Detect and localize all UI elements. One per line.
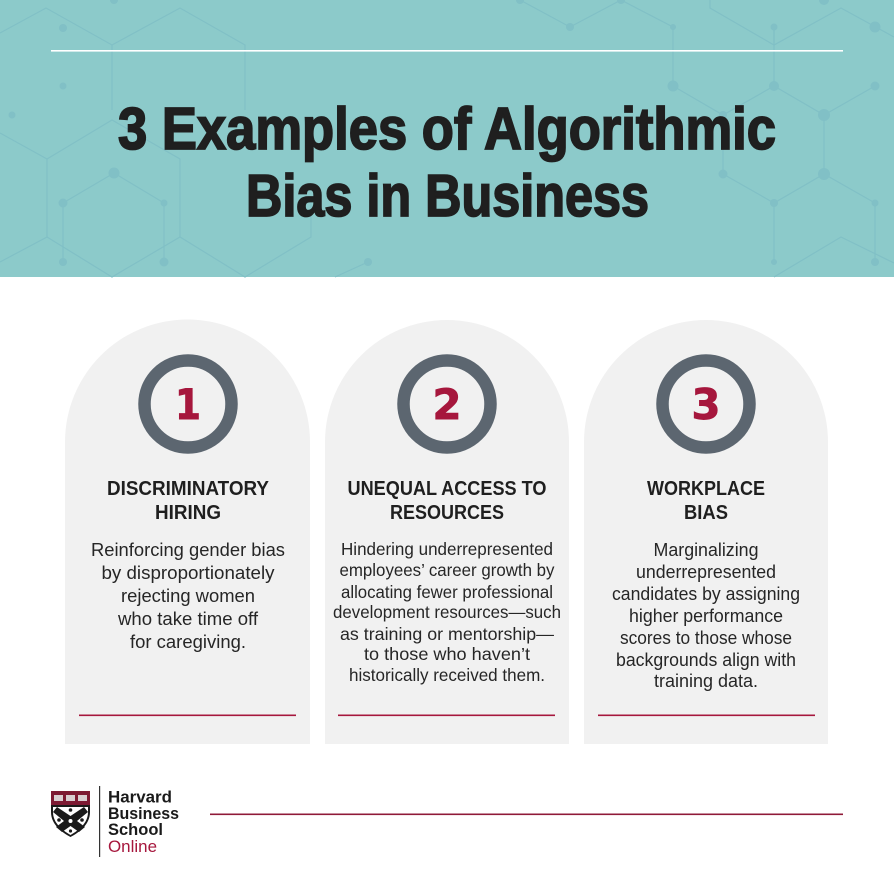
body text: card 2: employees’ career growth by	[340, 560, 555, 580]
body text: card 3: training data.	[654, 671, 758, 691]
heading: discriminatory hiring	[107, 478, 270, 524]
heading: workplace bias	[647, 478, 765, 524]
header banner	[0, 0, 894, 277]
heading: discriminatory hiring: DISCRIMINATORY	[107, 478, 270, 500]
body text: card 2: allocating fewer professional	[341, 582, 553, 602]
title	[118, 96, 776, 229]
body text: card 1: Reinforcing gender bias	[91, 539, 285, 560]
body text: card 2: as training or mentorship—	[340, 624, 554, 644]
panel: discriminatory hiring	[65, 319, 310, 744]
body text: card 2: to those who haven’t	[364, 644, 530, 664]
body text: card 1: for caregiving.	[130, 631, 246, 652]
icon: number 1 badge	[144, 360, 232, 448]
heading: unequal access to resources: RESOURCES	[390, 502, 504, 524]
body text: card 1: who take time off	[117, 608, 259, 629]
panel: unequal access to resources	[325, 320, 569, 744]
heading: workplace bias: BIAS	[684, 502, 728, 524]
heading: unequal access to resources: UNEQUAL ACCESS TO	[348, 478, 546, 500]
body text: card 3: Marginalizing	[654, 540, 758, 560]
body text: card 3: backgrounds align with	[616, 650, 796, 670]
body text: card 2: Hindering underrepresented	[341, 539, 553, 559]
body text: card 3: higher performance	[629, 606, 783, 626]
body text: card 3: underrepresented	[636, 562, 776, 582]
wordmark	[108, 788, 179, 856]
body text: card 2: development resources—such	[333, 602, 561, 622]
icon: number 2 badge: 2	[432, 380, 462, 429]
icon: number 1 badge: 1	[175, 380, 201, 429]
title: Bias in Business	[246, 163, 649, 229]
icon: number 3 badge	[662, 360, 750, 448]
body text: card 3: candidates by assigning	[612, 584, 800, 604]
icon: number 3 badge: 3	[692, 380, 720, 429]
heading: workplace bias: WORKPLACE	[647, 478, 765, 500]
body text: card 1: by disproportionately	[102, 562, 275, 583]
body text: card 2: historically received them.	[349, 665, 545, 685]
wordmark: Harvard	[108, 788, 172, 806]
body text: card 1	[91, 539, 285, 652]
wordmark: School	[108, 821, 163, 839]
wordmark: Online	[108, 838, 157, 856]
panel: workplace bias	[584, 320, 828, 744]
wordmark: Business	[108, 805, 179, 823]
heading: unequal access to resources	[348, 478, 546, 524]
icon: shield	[51, 791, 90, 837]
body text: card 2	[333, 539, 561, 685]
logo: Harvard Business School Online	[51, 786, 179, 857]
icon: number 2 badge	[404, 360, 490, 448]
body text: card 1: rejecting women	[121, 585, 255, 606]
title: 3 Examples of Algorithmic	[118, 96, 776, 162]
heading: discriminatory hiring: HIRING	[155, 502, 221, 524]
body text: card 3	[612, 540, 800, 691]
body text: card 3: scores to those whose	[620, 628, 792, 648]
